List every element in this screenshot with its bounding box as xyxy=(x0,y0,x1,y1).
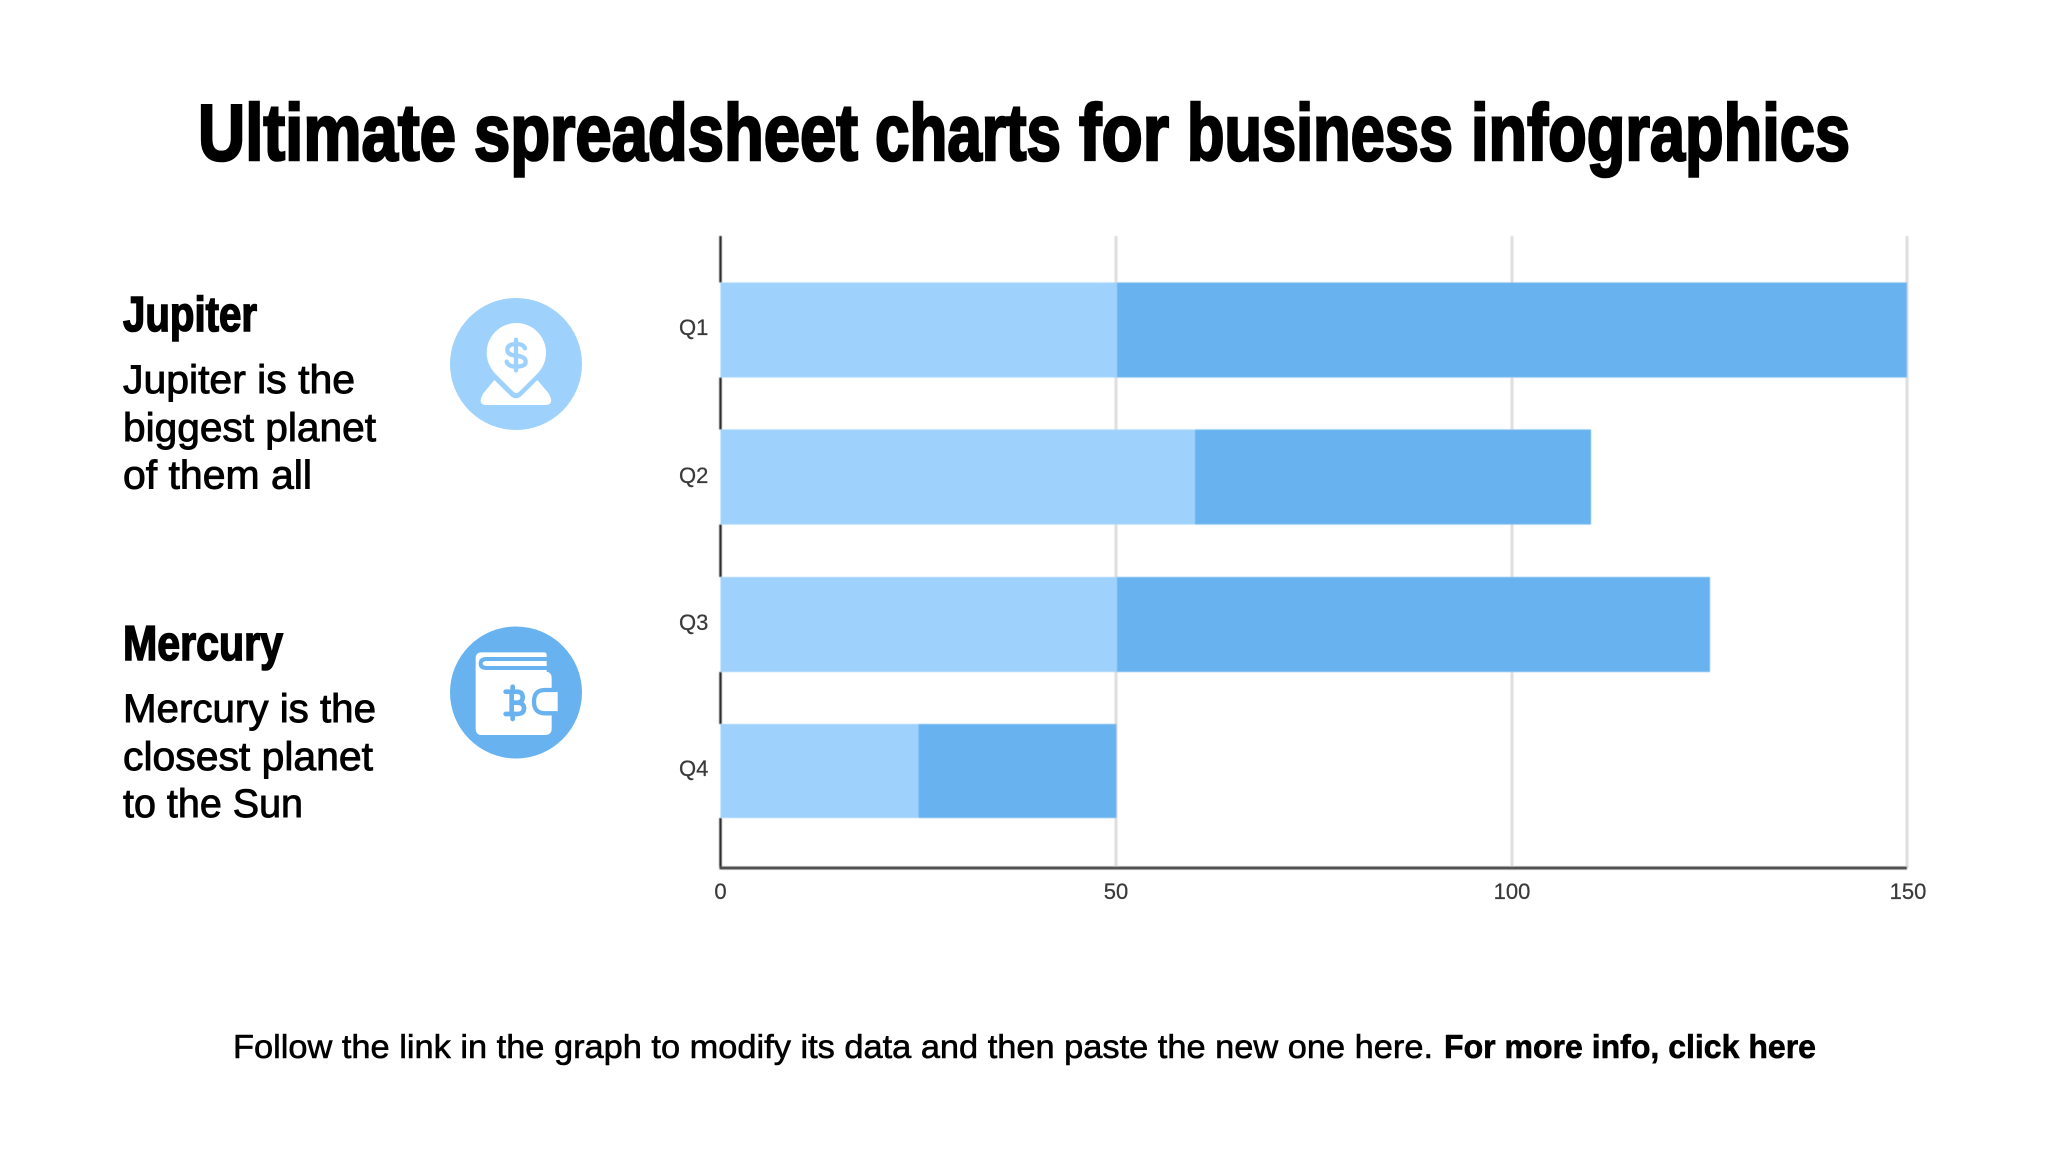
panel: Jupiter xyxy=(123,288,582,498)
value axis labels: 100 xyxy=(1494,879,1530,904)
icon: map pin with dollar xyxy=(450,298,582,430)
bars: Q4 xyxy=(720,724,1116,818)
text block: Jupiter description: biggest planet xyxy=(123,406,376,450)
category axis labels: Q3 xyxy=(679,610,708,635)
value axis labels xyxy=(714,879,1926,904)
value axis labels: 50 xyxy=(1104,879,1128,904)
text block: Mercury description: closest planet xyxy=(123,735,373,779)
panel: Mercury xyxy=(123,617,582,826)
title: Ultimate xyxy=(198,88,456,177)
value axis labels: 0 xyxy=(714,879,727,904)
value axis labels: 150 xyxy=(1890,879,1926,904)
heading: Mercury: Mercury xyxy=(123,617,283,671)
text block: Jupiter description: Jupiter is the xyxy=(123,358,355,402)
bars: Q1 xyxy=(720,282,1907,378)
text block: Mercury description: to the Sun xyxy=(123,782,303,826)
text block: Mercury description xyxy=(123,687,376,826)
title: business xyxy=(1187,88,1453,177)
text block: Jupiter description: of them all xyxy=(123,454,312,498)
bars: Q2 xyxy=(720,430,1591,524)
text block: Mercury description: Mercury is the xyxy=(123,687,376,731)
bar chart xyxy=(679,236,1926,904)
category axis labels: Q4 xyxy=(679,756,708,781)
title: infographics xyxy=(1471,88,1850,177)
heading: Jupiter: Jupiter xyxy=(123,288,257,342)
footer note: Follow the link in the graph to modify its data and then paste the new one here. xyxy=(233,1028,1433,1065)
category axis labels: Q2 xyxy=(679,463,708,488)
title: spreadsheet xyxy=(474,88,858,177)
footer link text: For more info, click here xyxy=(1444,1028,1816,1065)
text block: Jupiter description xyxy=(123,358,376,498)
icon: bitcoin wallet xyxy=(450,626,582,758)
bars: Q3 xyxy=(720,577,1710,672)
title: charts xyxy=(875,88,1061,177)
category axis labels: Q1 xyxy=(679,315,708,340)
category axis labels xyxy=(679,315,708,781)
title: for xyxy=(1079,88,1169,177)
